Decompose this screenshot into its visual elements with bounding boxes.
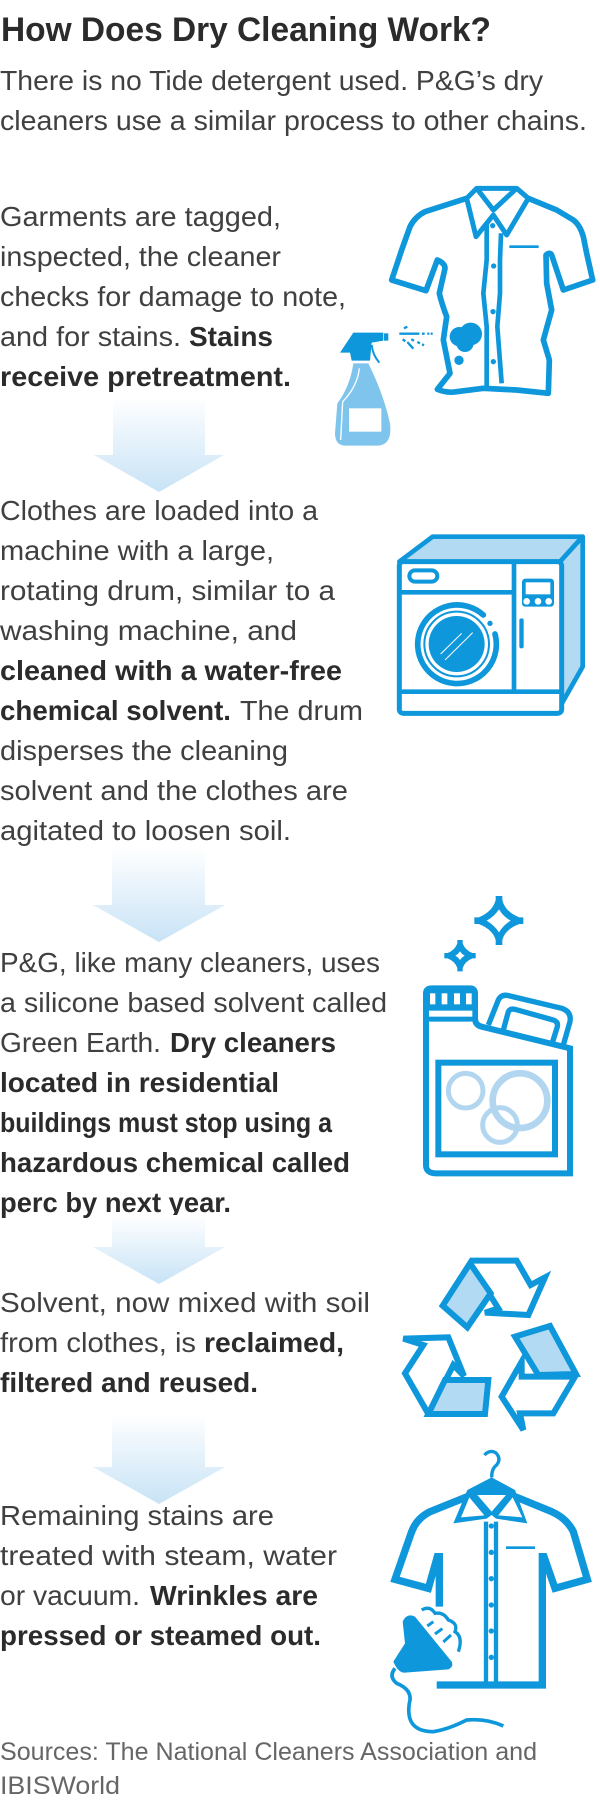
shirt buttons and pocket — [490, 223, 539, 364]
step 3 text: P&G, like many cleaners, uses — [0, 947, 380, 978]
step 2 text: washing machine, and — [0, 615, 297, 646]
spray mist — [399, 327, 433, 349]
step 5 text: treated with steam, water — [0, 1540, 337, 1571]
arrow 3 — [93, 1215, 225, 1284]
step 2 text: disperses the cleaning — [0, 735, 288, 766]
step 3 text: perc by next year. — [0, 1187, 231, 1218]
subtitle: cleaners use a similar process to other chains. — [0, 105, 587, 136]
pressed shirt — [395, 1497, 587, 1685]
icon: pressed shirt on hanger with steamer — [392, 1451, 587, 1732]
steamer — [393, 1615, 452, 1673]
jug handle — [488, 995, 570, 1045]
stain — [450, 323, 482, 365]
jug body — [426, 988, 570, 1173]
step 2 text — [0, 495, 363, 846]
step 2 text: Clothes are loaded into a — [0, 495, 318, 526]
arrow 2 — [93, 848, 225, 942]
step 3 text — [0, 947, 387, 1218]
step 4 text: Solvent, now mixed with soil — [0, 1287, 370, 1318]
step 3 text: hazardous chemical called — [0, 1147, 350, 1178]
step 1 text: and for stains. — [0, 321, 181, 352]
step 5 text: pressed or steamed out. — [0, 1620, 321, 1651]
step 2 text: The drum — [240, 695, 363, 726]
shirt placket — [483, 223, 502, 387]
step 2 text: rotating drum, similar to a — [0, 575, 335, 606]
title: How Does Dry Cleaning Work? — [1, 11, 491, 49]
step 1 text — [0, 201, 346, 392]
step 2 text: agitated to loosen soil. — [0, 815, 291, 846]
jug label and bubbles — [438, 1063, 555, 1154]
steamer cord — [392, 1668, 503, 1732]
step 3 text: a silicone based solvent called — [0, 987, 387, 1018]
shirt outline — [392, 198, 593, 393]
shirt collar — [467, 188, 528, 237]
step 4 text — [0, 1287, 370, 1398]
step 2 text: cleaned with a water-free — [0, 655, 342, 686]
icon: recycling arrows — [403, 1261, 576, 1430]
icon: washing machine — [399, 537, 583, 713]
step 3 text: Green Earth. — [0, 1027, 161, 1058]
sparkles — [444, 896, 523, 971]
step 1 text: checks for damage to note, — [0, 281, 346, 312]
icon: detergent jug with sparkles — [426, 896, 570, 1173]
source note: Sources: The National Cleaners Association and — [0, 1738, 537, 1766]
source note: IBISWorld — [0, 1772, 120, 1800]
step 3 text: buildings must stop using a — [0, 1107, 332, 1138]
step 2 text: machine with a large, — [0, 535, 274, 566]
source note — [0, 1738, 537, 1800]
step 2 text: chemical solvent. — [0, 695, 231, 726]
step 5 text: or vacuum. — [0, 1580, 140, 1611]
step 5 text: Wrinkles are — [150, 1580, 318, 1611]
subtitle: There is no Tide detergent used. P&G’s dry — [0, 65, 543, 96]
step 1 text: inspected, the cleaner — [0, 241, 281, 272]
step 5 text — [0, 1500, 337, 1651]
step 1 text: receive pretreatment. — [0, 361, 291, 392]
spray bottle — [335, 333, 390, 446]
hanger — [484, 1451, 499, 1477]
arrow 1 — [94, 397, 224, 492]
jug cap — [426, 988, 475, 1022]
step 1 text: Garments are tagged, — [0, 201, 281, 232]
subtitle — [0, 65, 587, 136]
step 4 text: from clothes, is — [0, 1327, 196, 1358]
step 5 text: Remaining stains are — [0, 1500, 274, 1531]
arrow 4 — [93, 1414, 225, 1504]
step 4 text: reclaimed, — [204, 1327, 344, 1358]
step 2 text: solvent and the clothes are — [0, 775, 348, 806]
step 4 text: filtered and reused. — [0, 1367, 258, 1398]
step 1 text: Stains — [189, 321, 273, 352]
icon: shirt with stain and spray bottle — [335, 188, 593, 446]
step 3 text: located in residential — [0, 1067, 279, 1098]
step 3 text: Dry cleaners — [170, 1027, 336, 1058]
